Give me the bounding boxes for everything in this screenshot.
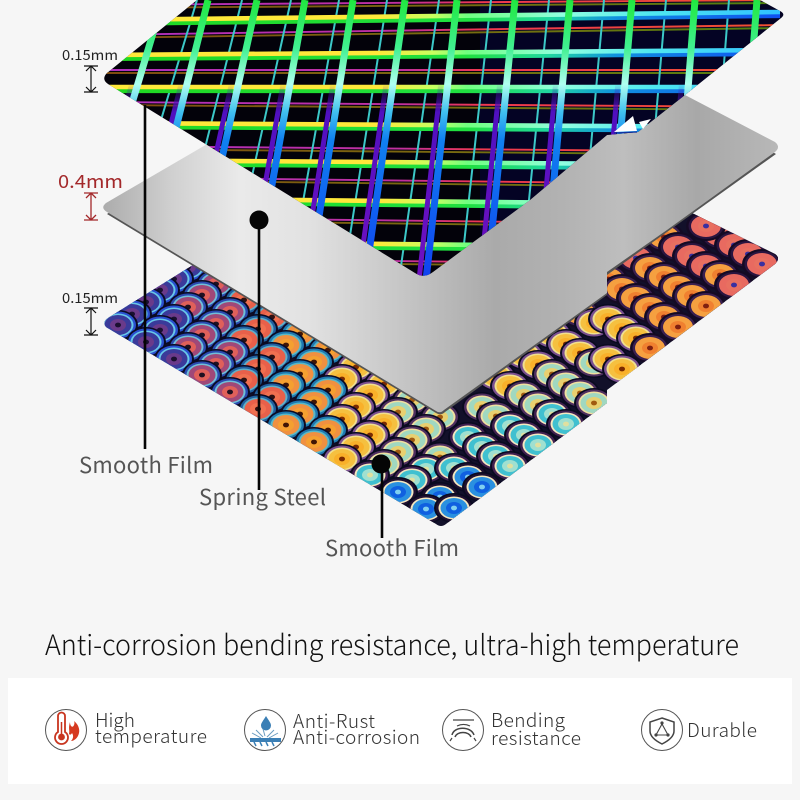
dimension: bottom film thickness: 0.15mm	[62, 288, 118, 308]
panel: feature strip	[8, 678, 792, 784]
icon: bending plate	[442, 710, 484, 750]
dimension: bottom film thickness	[62, 288, 118, 335]
icon: thermometer and flame	[46, 710, 86, 750]
middle layer: spring steel sheet	[103, 90, 778, 414]
text: anti-rust anti-corrosion: Anti-corrosion	[293, 723, 420, 750]
text: high temperature: High	[95, 706, 135, 733]
leader line: top smooth film	[144, 105, 146, 449]
top layer: smooth film with grid pattern	[73, 0, 790, 290]
feature: anti-rust anti-corrosion	[244, 707, 420, 750]
label: top smooth film: Smooth Film	[79, 448, 213, 480]
dimension: steel thickness: 0.4mm	[58, 168, 123, 194]
text: durable: Durable	[687, 716, 757, 743]
text: bending resistance: Bending	[491, 706, 566, 733]
label: bottom smooth film: Smooth Film	[325, 531, 459, 563]
leader line and dot: bottom smooth film	[372, 454, 390, 538]
text: anti-rust anti-corrosion: Anti-Rust	[293, 707, 375, 734]
corner notch highlight	[614, 116, 651, 133]
dimension: steel thickness	[58, 168, 123, 220]
bottom layer: smooth film with scale pattern	[104, 214, 778, 526]
dimension: top film thickness: 0.15mm	[62, 45, 118, 65]
feature: high temperature	[46, 706, 207, 750]
feature: bending resistance	[442, 706, 581, 751]
heading: Anti-corrosion bending resistance, ultra-high temperature	[45, 624, 739, 664]
label: spring steel: Spring Steel	[199, 480, 326, 512]
icon: shield	[642, 710, 682, 750]
icon: water drop on surface	[244, 710, 286, 750]
text: high temperature: temperature	[95, 722, 207, 749]
feature: durable	[642, 710, 757, 750]
dimension: top film thickness	[62, 45, 118, 92]
text: bending resistance: resistance	[491, 724, 581, 751]
leader line and dot: spring steel	[250, 210, 268, 490]
